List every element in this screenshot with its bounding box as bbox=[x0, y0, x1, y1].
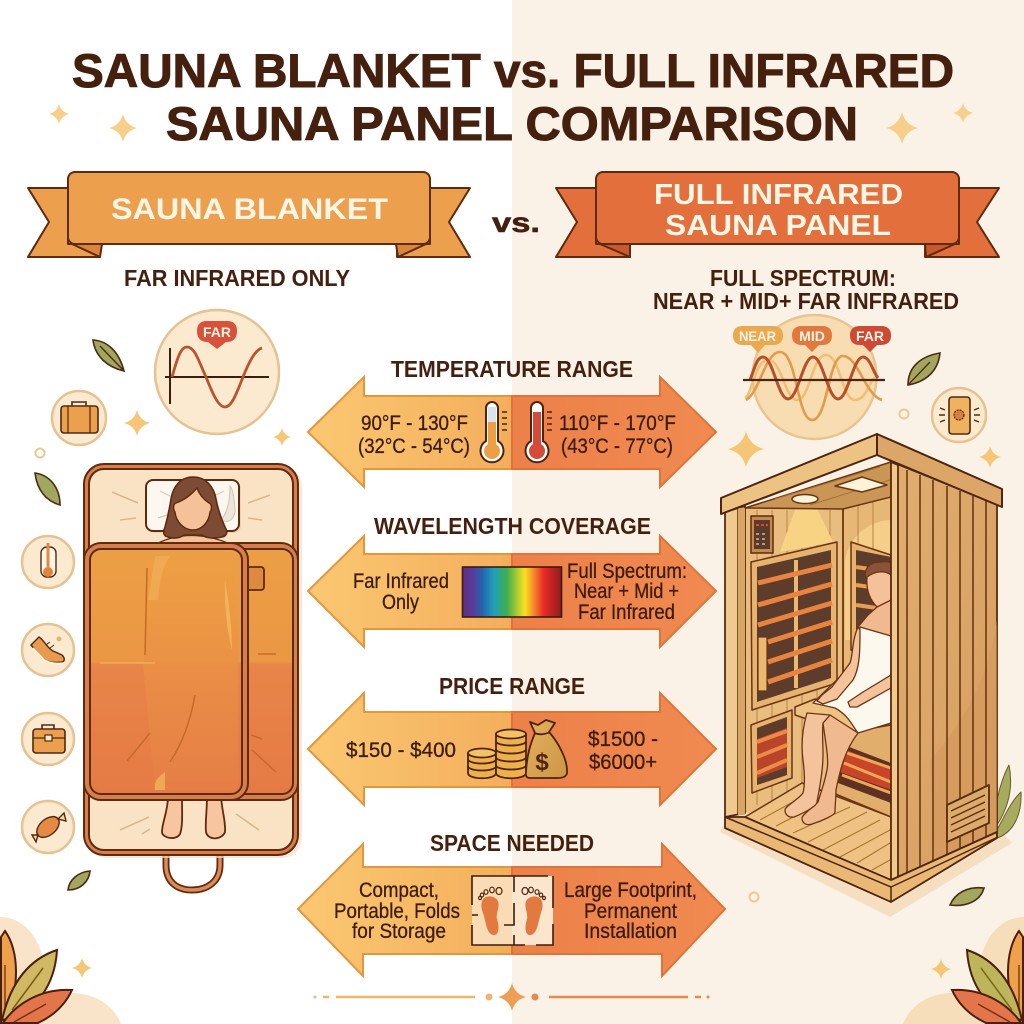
base bbox=[725, 817, 997, 902]
comparison arrow: wavelength coverage: Far Infrared bbox=[353, 570, 449, 593]
title: SAUNA PANEL COMPARISON bbox=[166, 97, 858, 150]
illustration: infrared sauna cabin bbox=[720, 434, 1021, 917]
subtitle: blanket spectrum: FAR INFRARED ONLY bbox=[124, 265, 350, 291]
comparison arrow: price range bbox=[308, 673, 716, 805]
comparison arrow: space needed: Compact, bbox=[359, 879, 439, 902]
floor bbox=[745, 783, 891, 880]
comparison arrow: price range: $1500 - bbox=[588, 728, 658, 751]
decorative leaves and sparkles: left column bbox=[35, 340, 291, 978]
title: SAUNA BLANKET vs. FULL INFRARED bbox=[72, 44, 954, 97]
subtitle: panel spectrum: FULL SPECTRUM: bbox=[710, 265, 896, 291]
interior light beam bbox=[780, 504, 833, 552]
comparison arrow: temperature range: (43°C - 77°C) bbox=[561, 435, 673, 458]
heading: PRICE RANGE bbox=[439, 673, 585, 699]
comparison arrow: space needed: Permanent bbox=[584, 900, 677, 923]
comparison arrow: space needed: Installation bbox=[584, 920, 677, 943]
front blanket bbox=[84, 543, 248, 800]
infrared heater panel: side bbox=[851, 542, 891, 660]
ceiling lights bbox=[835, 477, 887, 492]
heading: TEMPERATURE RANGE bbox=[391, 356, 633, 382]
heading: WAVELENGTH COVERAGE bbox=[374, 513, 651, 539]
chart: far infrared wave bbox=[155, 310, 279, 434]
icon: thermometer low bbox=[480, 402, 507, 462]
comparison arrow: price range: $6000+ bbox=[589, 751, 657, 774]
decorative corner foliage: bottom left bbox=[0, 917, 121, 1024]
icon: thermometer bbox=[22, 536, 74, 588]
comparison arrow: wavelength coverage: Far Infrared bbox=[578, 601, 675, 624]
comparison arrow: wavelength coverage: Full Spectrum: bbox=[567, 560, 687, 583]
pillow bbox=[148, 482, 241, 533]
icon: candy bbox=[22, 801, 74, 853]
comparison arrow: temperature range: (32°C - 54°C) bbox=[358, 435, 470, 458]
spectrum swatch bbox=[462, 567, 562, 617]
title bbox=[72, 44, 954, 150]
illustration: sauna blanket with person bbox=[84, 464, 302, 890]
subtitle: panel spectrum: NEAR + MID+ FAR INFRARED bbox=[653, 288, 959, 314]
icon: shoe bbox=[22, 624, 74, 676]
comparison arrow: space needed bbox=[298, 830, 725, 976]
decorative divider bbox=[314, 983, 710, 1011]
icon: suitcase bbox=[52, 391, 106, 445]
bag handle bbox=[166, 850, 220, 890]
back flap bbox=[200, 543, 298, 800]
icon: smartphone bbox=[932, 388, 986, 442]
plant behind cabin bbox=[997, 765, 1021, 838]
icon: coins and money bag bbox=[468, 720, 567, 778]
chart: near, mid and far infrared waves bbox=[733, 315, 891, 439]
versus label: vs. bbox=[492, 207, 540, 238]
comparison arrow: space needed: for Storage bbox=[352, 920, 446, 943]
seated person in towel bbox=[785, 562, 892, 825]
ribbon: sauna blanket bbox=[28, 172, 470, 257]
left post bbox=[725, 506, 745, 817]
control panel bbox=[751, 516, 773, 553]
comparison arrow: wavelength coverage bbox=[308, 513, 716, 647]
vent bbox=[947, 785, 989, 842]
corner post bbox=[891, 462, 898, 880]
infrared heater panel: back upper bbox=[751, 542, 837, 710]
comparison arrow: wavelength coverage: Only bbox=[382, 591, 419, 614]
person head bbox=[158, 536, 228, 543]
comparison arrow: temperature range: 110°F - 170°F bbox=[559, 412, 676, 435]
bench bbox=[795, 699, 891, 817]
bag base bbox=[87, 466, 302, 858]
chart: near, mid and far infrared waves: MID bbox=[799, 328, 825, 344]
comparison arrow: temperature range bbox=[308, 356, 716, 487]
comparison arrow: temperature range: 90°F - 130°F bbox=[361, 412, 468, 435]
chart: far infrared wave: FAR bbox=[203, 324, 231, 340]
interior back wall bbox=[745, 508, 843, 813]
comparison arrow: price range: $150 - $400 bbox=[346, 739, 456, 762]
icon: footprints in floor area bbox=[472, 876, 553, 945]
ribbon: sauna blanket: SAUNA BLANKET bbox=[111, 193, 388, 226]
decorative leaves and sparkles: right column bbox=[728, 353, 1001, 979]
subtitle: panel spectrum bbox=[653, 265, 959, 314]
tab bbox=[240, 567, 264, 590]
comparison arrow: wavelength coverage: Near + Mid + bbox=[574, 580, 679, 603]
icon: thermometer high bbox=[526, 402, 552, 462]
right wall bbox=[892, 462, 997, 880]
comparison arrow: space needed: Large Footprint, bbox=[564, 879, 697, 902]
heading: SPACE NEEDED bbox=[430, 830, 594, 856]
ribbon: full infrared sauna panel: SAUNA PANEL bbox=[665, 210, 891, 242]
decorative sparkles: title bbox=[49, 103, 973, 144]
ribbon: full infrared sauna panel: FULL INFRARED bbox=[654, 179, 903, 211]
ribbon: full infrared sauna panel bbox=[556, 172, 999, 257]
ceiling bbox=[745, 462, 891, 509]
ground shadow bbox=[720, 810, 1012, 917]
roof bbox=[721, 434, 1002, 514]
icon: briefcase bbox=[22, 713, 74, 765]
icon: coins and money bag: $ bbox=[535, 749, 549, 776]
chart: near, mid and far infrared waves: FAR bbox=[856, 328, 884, 344]
comparison arrow: space needed: Portable, Folds bbox=[334, 900, 460, 923]
infrared heater panel: back lower bbox=[751, 710, 792, 793]
chart: near, mid and far infrared waves: NEAR bbox=[739, 328, 776, 344]
decorative corner foliage: bottom right bbox=[903, 917, 1024, 1024]
feet bbox=[162, 796, 182, 838]
